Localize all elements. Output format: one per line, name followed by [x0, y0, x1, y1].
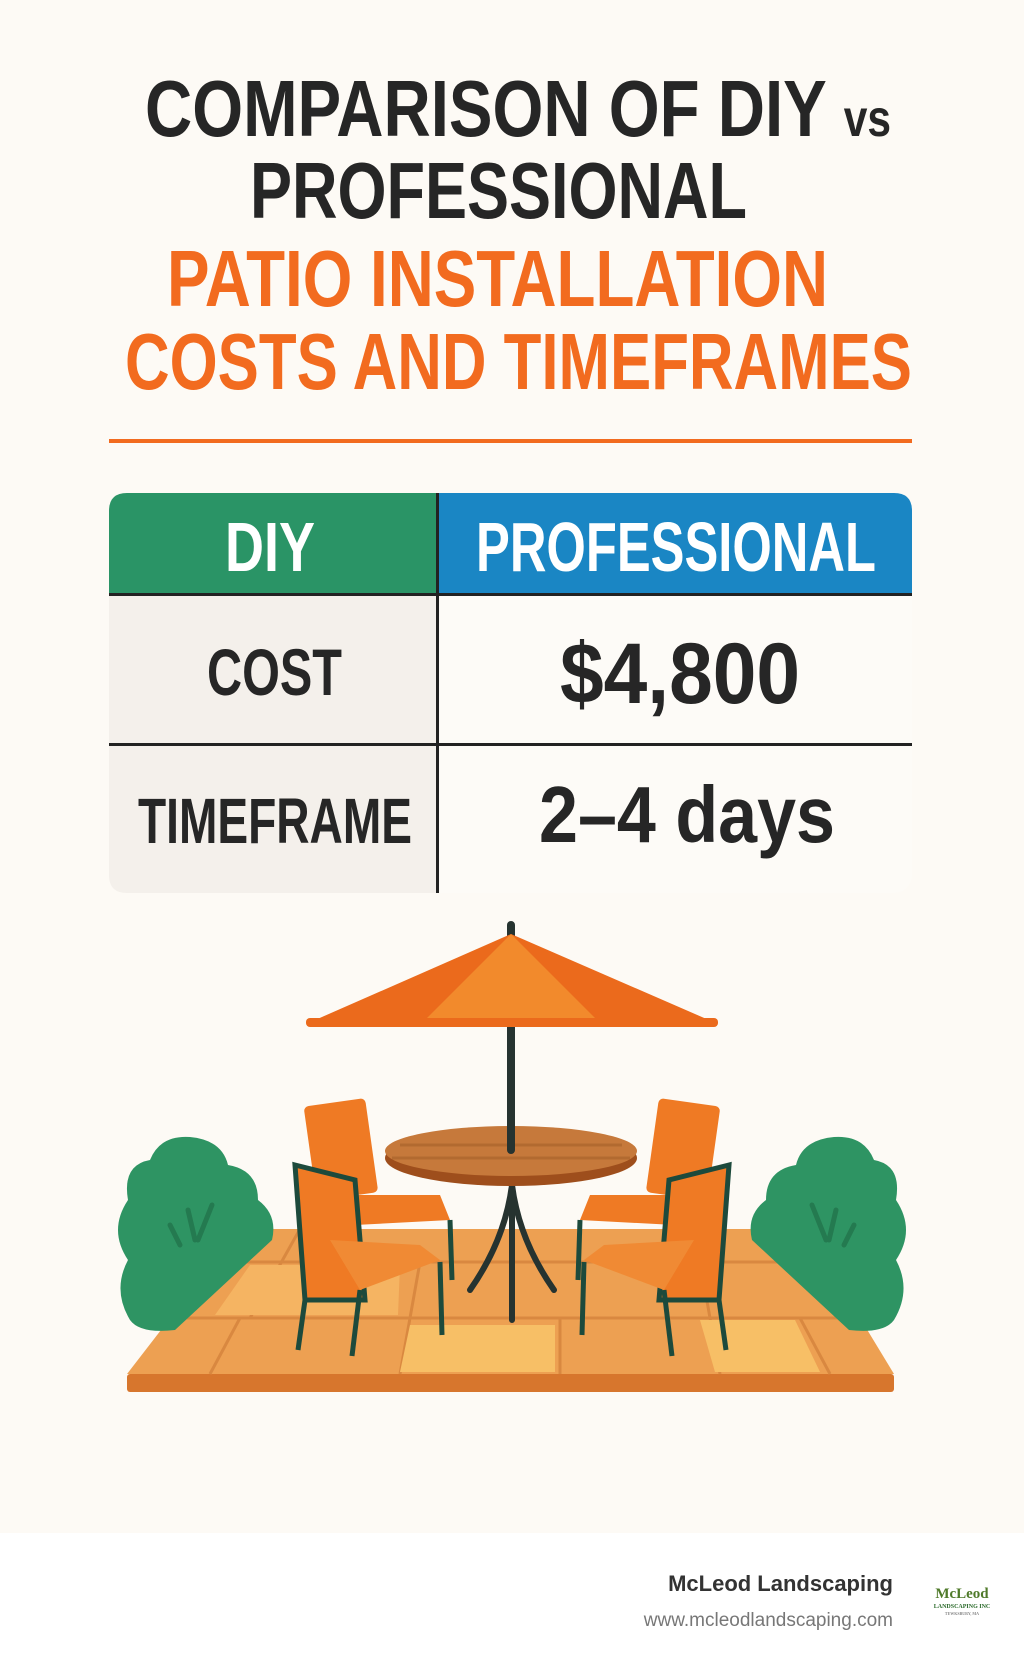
logo: LANDSCAPING INC — [934, 1604, 990, 1610]
chairs front — [295, 1165, 729, 1356]
row: timeframe: 2–4 days — [539, 770, 835, 859]
row: cost: $4,800 — [560, 626, 800, 722]
title: PATIO INSTALLATION — [167, 234, 828, 323]
row: cost — [207, 626, 800, 722]
title: PROFESSIONAL — [250, 146, 747, 235]
footer brand: McLeod Landscaping — [668, 1571, 893, 1596]
bush left — [118, 1137, 273, 1331]
logo: TEWKSBURY, MA — [945, 1611, 979, 1616]
row: timeframe: TIMEFRAME — [138, 785, 412, 857]
footer brand: www.mcleodlandscaping.com — [643, 1610, 893, 1631]
header: PROFESSIONAL: PROFESSIONAL — [476, 508, 876, 586]
logo: McLeod — [935, 1586, 989, 1602]
chairs back — [304, 1098, 720, 1290]
header: DIY: DIY — [225, 508, 315, 586]
table — [385, 1126, 637, 1320]
footer brand — [643, 1571, 893, 1631]
paving — [127, 1229, 894, 1392]
bush right — [751, 1137, 906, 1331]
title: COMPARISON OF DIY vs — [145, 64, 891, 153]
row: timeframe — [138, 770, 835, 859]
header: PROFESSIONAL — [438, 493, 912, 594]
header: DIY — [109, 493, 438, 594]
logo — [934, 1586, 990, 1616]
umbrella — [306, 925, 718, 1150]
row: cost: COST — [207, 635, 342, 709]
illustration: patio — [118, 925, 906, 1392]
comparison table — [109, 493, 912, 893]
title — [125, 64, 912, 406]
